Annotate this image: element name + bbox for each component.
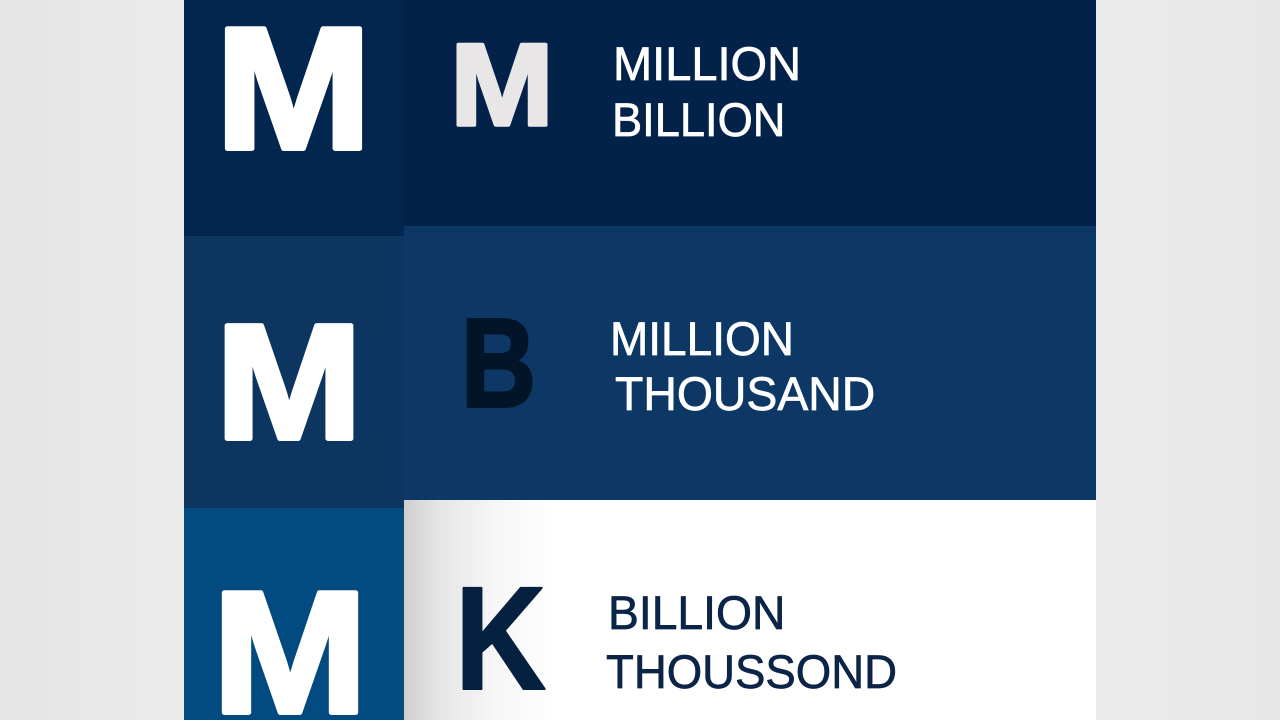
label: thousand: THOUSAND: [615, 367, 875, 420]
label: thoussond: THOUSSOND: [606, 645, 897, 698]
label: billion: BILLION: [608, 586, 785, 639]
panel: left column middle: [184, 236, 404, 508]
panel: left column bottom: [184, 508, 404, 720]
label: million: MILLION: [610, 312, 794, 365]
panel: right row top: [404, 0, 1096, 226]
small letter B: B: [461, 292, 536, 434]
panel: right row bottom: [404, 500, 1096, 720]
small letter K: K: [455, 557, 546, 720]
small letter M: M: [450, 19, 554, 150]
large letter M middle: M: [216, 290, 362, 474]
panel: left column top: [184, 0, 404, 236]
label: million: MILLION: [613, 37, 801, 90]
label: billion: BILLION: [612, 93, 785, 146]
panel: right row middle: [404, 226, 1096, 500]
